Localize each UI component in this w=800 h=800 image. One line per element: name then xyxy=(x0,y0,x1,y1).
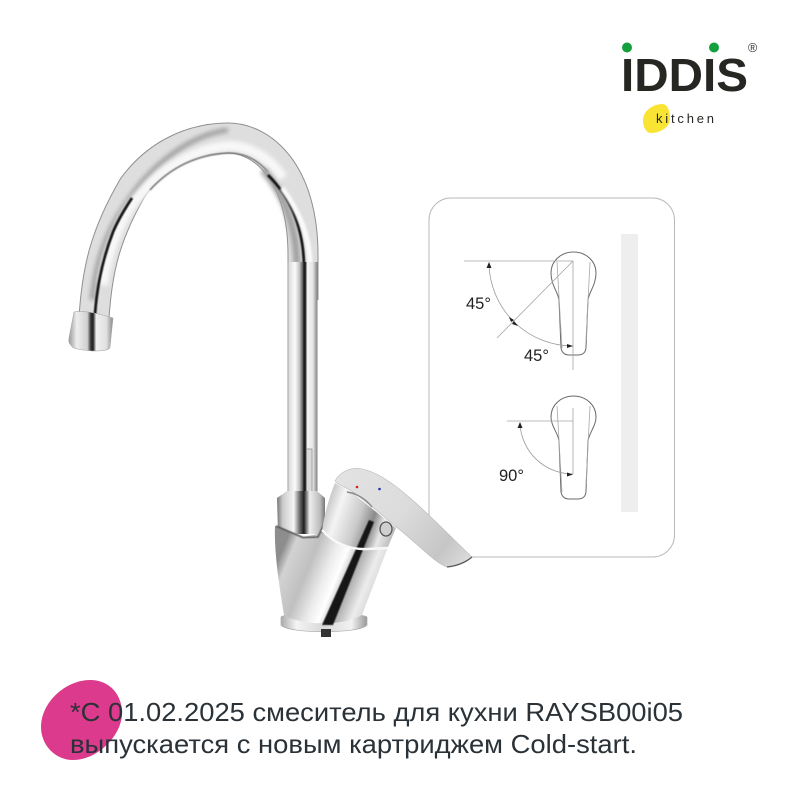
cold indicator xyxy=(378,488,381,490)
arrowheads xyxy=(518,422,573,476)
body top shadow xyxy=(276,520,326,538)
panel outline xyxy=(429,198,674,557)
diagram: 90 degree position xyxy=(507,396,596,499)
cartridge button xyxy=(380,522,392,536)
outlet stem xyxy=(321,629,331,637)
mixer head xyxy=(322,483,396,550)
arrowheads xyxy=(486,262,573,348)
angle arc xyxy=(489,264,573,346)
vertical riser xyxy=(288,262,318,498)
lever underside shadow xyxy=(447,557,472,567)
diagram: 45 degree positions xyxy=(464,252,596,370)
angle guide lines xyxy=(507,408,573,474)
mixer body xyxy=(275,526,388,623)
angle guide lines xyxy=(464,261,573,370)
base ring xyxy=(281,613,367,632)
icon: pink blob xyxy=(41,680,122,760)
riser clip detail xyxy=(306,449,312,492)
lever handle xyxy=(335,468,472,567)
head band xyxy=(322,530,388,549)
icon: green dot left xyxy=(622,42,632,52)
panel: lever rotation diagram xyxy=(429,198,674,557)
hot indicator xyxy=(356,486,358,488)
registered mark: ® xyxy=(748,41,758,55)
note text xyxy=(70,697,683,759)
grey side bar xyxy=(621,234,638,512)
icon: green dot right xyxy=(709,42,719,52)
logo wordmark: IDDIS xyxy=(621,49,748,101)
aerator nozzle xyxy=(69,311,113,351)
angle arc xyxy=(520,424,573,474)
label: 45 degrees lower: 45° xyxy=(524,347,549,365)
icon: yellow blob xyxy=(643,104,670,133)
lever outline top xyxy=(551,252,596,355)
dark body reflection xyxy=(322,520,374,625)
faucet illustration xyxy=(69,130,472,637)
note line 2: выпускается с новым картриджем Cold-start. xyxy=(70,729,637,759)
logo subtitle: kitchen xyxy=(656,111,714,126)
label: 90 degrees: 90° xyxy=(499,467,524,485)
spout tube xyxy=(92,130,310,318)
logo: IDDIS kitchen xyxy=(621,41,758,133)
lever outline bottom xyxy=(551,396,596,499)
label: 45 degrees upper: 45° xyxy=(466,295,491,313)
note line 1: *С 01.02.2025 смеситель для кухни RAYSB00i05 xyxy=(70,697,683,727)
collar xyxy=(277,491,325,534)
lever pivot detail xyxy=(347,492,372,507)
